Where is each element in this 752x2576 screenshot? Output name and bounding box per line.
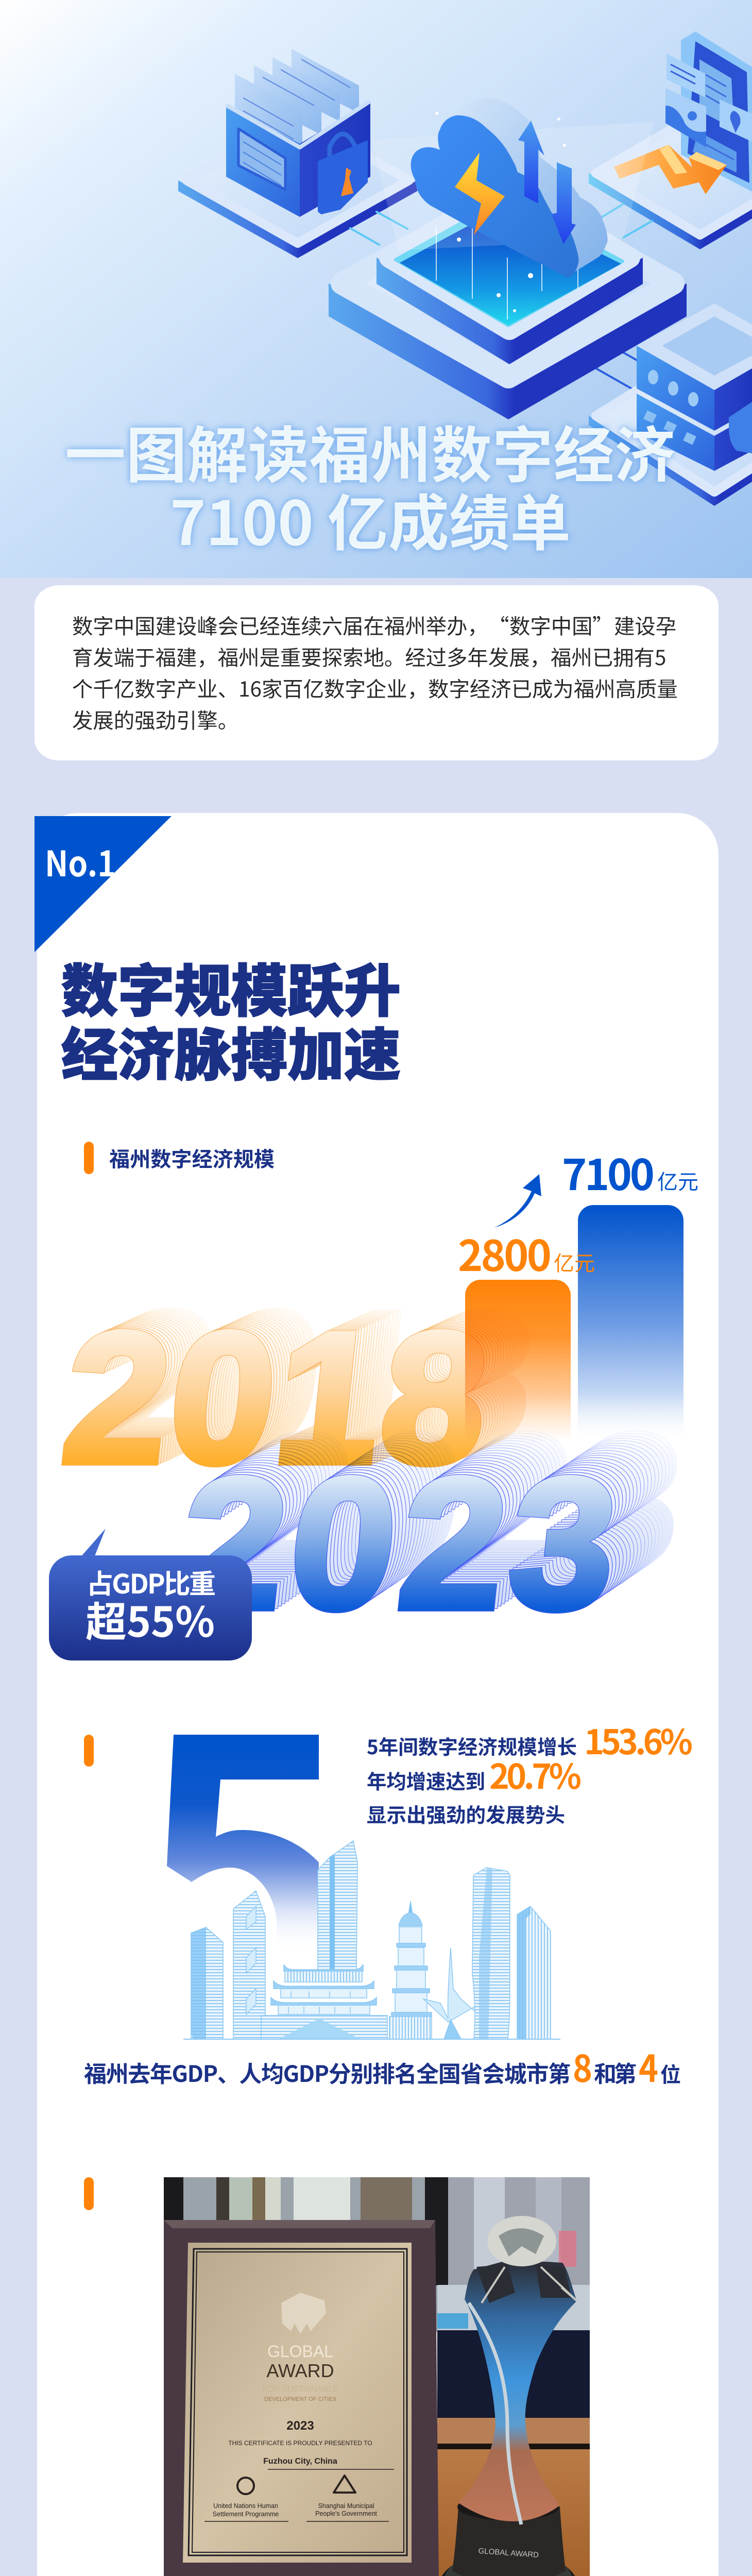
intro paragraph: “ <box>488 609 509 640</box>
plaque text: THIS CERTIFICATE IS PROUDLY PRESENTED TO <box>228 2439 372 2447</box>
text block: growth figures: 显示出强劲的发展势头 <box>367 1800 565 1828</box>
year numeral: 2023: 2023 <box>193 1425 654 1633</box>
plaque text <box>213 2342 377 2518</box>
intro paragraph: 数字中国建设峰会已经连续六届在福州举办， <box>72 609 488 640</box>
year numeral: 2018: 2018 <box>72 1285 516 1494</box>
value: 7100: 亿元 <box>657 1165 698 1195</box>
year numeral: 2018: 2018 <box>69 1286 514 1495</box>
year numeral: 2018: 2018 <box>80 1281 525 1490</box>
year numeral: 2018: 2018 <box>86 1279 531 1487</box>
text block: growth figures: 20.7% <box>489 1750 582 1799</box>
year numeral: 2018: 2018 <box>91 1276 536 1485</box>
year numeral: 2018: 2018 <box>60 1291 505 1499</box>
year numeral: 2018: 2018 <box>69 1286 514 1495</box>
value: 2800: 2800 <box>458 1222 552 1283</box>
icon: central platform with cloud <box>329 98 687 419</box>
callout: share of GDP <box>49 1529 252 1660</box>
year numeral: 2018: 2018 <box>86 1279 531 1487</box>
connector lines <box>350 204 652 392</box>
year numeral: 2023: 2023 <box>236 1395 697 1604</box>
intro paragraph <box>72 609 678 734</box>
year numeral: 2018: 2018 <box>83 1280 527 1489</box>
plaque text: DEVELOPMENT OF CITIES <box>264 2396 336 2402</box>
year numeral: 2018: 2018 <box>91 1276 536 1485</box>
intro paragraph: ” <box>592 609 613 640</box>
plaque text: Shanghai Municipal <box>318 2502 374 2510</box>
plaque text: 2023 <box>286 2419 314 2433</box>
badge: No.1 triangle: No.1 <box>45 836 116 887</box>
year numeral: 2023: 2023 <box>207 1415 669 1623</box>
icon: bottom-right server stack <box>589 303 752 506</box>
building 1 <box>191 1927 223 2039</box>
year numeral: 2023: 2023 <box>211 1412 672 1621</box>
temple <box>261 1964 387 2039</box>
year numeral: 2018: 2018 <box>57 1292 502 1500</box>
text: GDP ranking <box>84 2039 681 2093</box>
plaque text: People's Government <box>315 2510 377 2517</box>
year numeral: 2023: 2023 <box>207 1415 669 1623</box>
year numeral: 2018: 2018 <box>66 1288 511 1497</box>
year numeral: 2018: 2018 <box>97 1274 542 1482</box>
year numeral: 2023: 2023 <box>171 1439 633 1648</box>
year numeral: 2023: 2023 <box>185 1429 647 1638</box>
heading: section title: 数字规模跃升 <box>61 945 401 1028</box>
title: 7100 亿成绩单 <box>170 474 571 563</box>
text block: growth figures: 153.6% <box>584 1715 693 1765</box>
year numeral: 2023: 2023 <box>200 1419 661 1628</box>
bar: 2018 value <box>465 1280 571 1450</box>
year numeral: 2018: 2018 <box>77 1283 522 1492</box>
year numeral: 2023: 2023 <box>229 1400 690 1609</box>
year numeral: 2023: 2023 <box>196 1422 658 1631</box>
heading: section title: 经济脉搏加速 <box>61 1009 401 1092</box>
year numeral: 2023: 2023 <box>236 1395 697 1604</box>
plaque text: AWARD <box>266 2360 334 2381</box>
year numeral: 2018: 2018 <box>63 1289 508 1498</box>
year numeral: 2018: 2018 <box>99 1273 544 1481</box>
year numeral: 2023: 2023 <box>189 1427 651 1635</box>
year numeral: 2018: 2018 <box>55 1293 500 1502</box>
badge: No.1 triangle <box>35 816 172 952</box>
building 5 <box>517 1906 551 2039</box>
callout: share of GDP: 超55% <box>86 1589 215 1649</box>
year numeral: 2023: 2023 <box>171 1439 633 1648</box>
year numeral: 2023: 2023 <box>178 1434 640 1642</box>
year numeral: 2018: 2018 <box>80 1281 525 1490</box>
value: 7100: 7100 <box>562 1141 655 1202</box>
title <box>63 421 677 554</box>
year numeral: 2023: 2023 <box>211 1412 672 1621</box>
year numeral: 2023: 2023 <box>221 1405 683 1614</box>
text: GDP ranking: 位 <box>660 2058 681 2088</box>
panel: main white card <box>37 813 719 2576</box>
plaque text: Settlement Programme <box>213 2511 279 2518</box>
header banner with isometric illustration <box>0 0 752 578</box>
year numeral: 2023: 2023 <box>193 1425 654 1633</box>
year numeral: 2023: 2023 <box>229 1400 690 1609</box>
big numeral 5 <box>167 1735 319 1958</box>
year numeral: 2023: 2023 <box>182 1432 643 1640</box>
panel: intro text <box>35 585 719 760</box>
value: 2800: 亿元 <box>554 1247 595 1277</box>
building 4 <box>472 1868 510 2039</box>
marker: orange pill 1 <box>84 1142 94 1174</box>
plaque text: FOR SUSTAINABLE <box>262 2385 338 2394</box>
year numeral: 2023: 2023 <box>185 1429 647 1638</box>
text: GDP ranking: 和第 <box>594 2056 637 2089</box>
value: 2800 <box>458 1222 595 1283</box>
trophy <box>442 2565 575 2576</box>
year numeral: 2023: 2023 <box>225 1402 687 1611</box>
intro paragraph: 个千亿数字产业、16家百亿数字企业，数字经济已成为福州高质量 <box>72 672 678 703</box>
intro paragraph: 数字中国 <box>509 609 593 640</box>
text block: growth figures: 年均增速达到 <box>367 1766 485 1795</box>
year numeral: 2018: 2018 <box>77 1283 522 1492</box>
year numeral: 2023: 2023 <box>196 1422 658 1631</box>
year numeral: 2023: 2023 <box>214 1410 676 1618</box>
year numeral: 2018: 2018 <box>97 1274 542 1482</box>
year numeral: 2023: 2023 <box>232 1398 694 1606</box>
year numeral: 2018: 2018 <box>57 1292 502 1500</box>
building 3 <box>318 1841 357 1971</box>
marker: orange pill 3 <box>84 2177 94 2210</box>
plaque text: Fuzhou City, China <box>263 2457 337 2466</box>
year numeral: 2023: 2023 <box>178 1434 640 1642</box>
intro paragraph: 发展的强劲引擎。 <box>72 704 238 734</box>
year numeral: 2018: 2018 <box>88 1278 533 1486</box>
year numeral: 2018: 2018 <box>94 1275 539 1484</box>
marker: orange pill 2 <box>84 1735 94 1767</box>
sail sculpture <box>423 1948 484 2039</box>
icon: left platform with locked document box <box>178 49 417 258</box>
text block: growth figures <box>367 1715 693 1828</box>
year numeral: 2018: 2018 <box>55 1293 500 1502</box>
year numeral: 2023: 2023 <box>200 1419 661 1628</box>
illustration: Fuzhou skyline <box>183 1841 560 2039</box>
year numeral: 2018: 2018 <box>94 1275 539 1484</box>
year numeral: 2018: 2018 <box>88 1278 533 1486</box>
photo: award plaque and trophy: GLOBAL AWARD <box>478 2547 539 2560</box>
bar: 2023 value <box>578 1205 683 1450</box>
year numeral: 2023: 2023 <box>218 1408 679 1616</box>
year numeral: 2023: 2023 <box>221 1405 683 1614</box>
heading: section title <box>61 945 401 1092</box>
text block: growth figures: 5年间数字经济规模增长 <box>367 1732 577 1760</box>
year numeral: 2018: 2018 <box>83 1280 527 1489</box>
year numeral: 2023: 2023 <box>203 1417 665 1626</box>
intro paragraph: 建设孕 <box>614 609 676 640</box>
value: 7100 <box>562 1141 698 1202</box>
year numeral: 2018: 2018 <box>63 1289 508 1498</box>
year numeral: 2018: 2018 <box>74 1284 519 1493</box>
year numeral: 2023: 2023 <box>182 1432 643 1640</box>
year numeral: 2018: 2018 <box>74 1284 519 1493</box>
label: Fuzhou digital economy scale: 福州数字经济规模 <box>109 1143 275 1173</box>
building 2 <box>233 1891 265 2039</box>
text: GDP ranking: 4 <box>639 2039 658 2093</box>
year numeral: 2018: 2018 <box>66 1288 511 1497</box>
icon: top-right platform with phone and chart arrow <box>589 31 752 249</box>
year numeral: 2023: 2023 <box>175 1436 636 1645</box>
year numeral: 2018: 2018 <box>99 1273 544 1481</box>
year numeral: 2023: 2023 <box>225 1402 687 1611</box>
year numeral: 2023: 2023 <box>189 1427 651 1635</box>
year numeral: 2023: 2023 <box>175 1436 636 1645</box>
year numeral: 2023: 2023 <box>218 1408 679 1616</box>
year numeral: 2023: 2023 <box>232 1398 694 1606</box>
pagoda <box>389 1901 432 2039</box>
year numeral: 2023: 2023 <box>214 1410 676 1618</box>
plaque text: United Nations Human <box>213 2502 278 2510</box>
year numeral: 2018: 2018 <box>72 1285 516 1494</box>
callout: share of GDP: 占GDP比重 <box>87 1563 216 1601</box>
photo: award plaque and trophy <box>164 2177 590 2576</box>
text: GDP ranking: 福州去年GDP、人均GDP分别排名全国省会城市第 <box>84 2056 571 2089</box>
intro paragraph: 育发端于福建，福州是重要探索地。经过多年发展，福州已拥有5 <box>72 641 666 671</box>
plaque logo <box>281 2293 326 2334</box>
arrow: growth <box>494 1174 541 1228</box>
year numeral: 2023: 2023 <box>203 1417 665 1626</box>
year numeral: 2018: 2018 <box>60 1291 505 1499</box>
plaque text: GLOBAL <box>267 2342 333 2361</box>
chart: 2018 vs 2023 bars with layered year numerals <box>55 1141 698 1648</box>
text: GDP ranking: 8 <box>573 2039 592 2093</box>
title: 一图解读福州数字经济 <box>65 406 675 495</box>
